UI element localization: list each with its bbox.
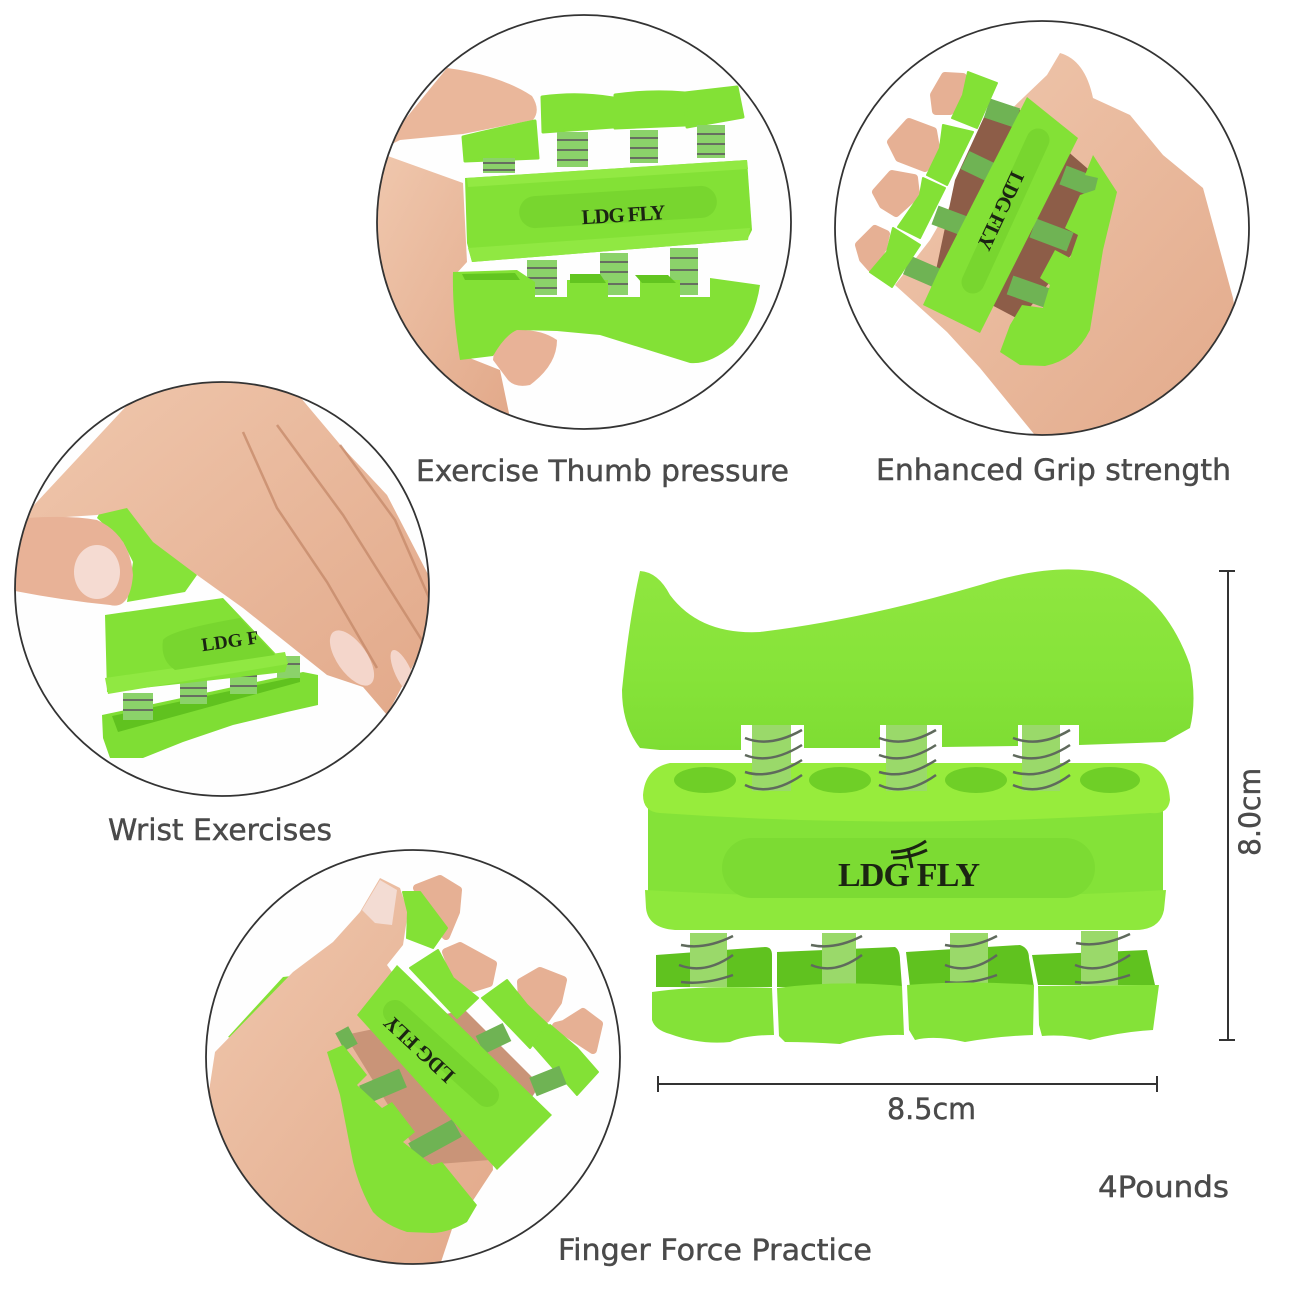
upper springs — [483, 125, 725, 173]
panel: wrist exercises photo — [10, 370, 440, 805]
middle block — [643, 763, 1170, 930]
block body — [648, 805, 1163, 895]
logo: LDG FLY — [838, 857, 980, 894]
dimension: height 8.0cm: 8.0cm — [1233, 768, 1267, 856]
logo: LDG FLY — [581, 200, 666, 229]
main product: finger exerciser — [622, 569, 1194, 1044]
panel: exercise thumb pressure photo — [370, 10, 800, 440]
springs — [123, 656, 300, 720]
label: 4 pounds: 4Pounds — [1098, 1170, 1229, 1204]
finger pads — [403, 892, 598, 1095]
device base — [102, 672, 318, 758]
fingers — [859, 76, 963, 268]
block top rim — [643, 763, 1170, 822]
block lower rim — [645, 890, 1166, 930]
gaps between springs — [345, 1010, 540, 1165]
lower springs — [679, 931, 1130, 987]
hand — [895, 53, 1250, 445]
logo: LDG F — [200, 627, 260, 656]
grip pockets — [462, 273, 676, 283]
hand — [20, 370, 432, 715]
logo: LDG FLY — [379, 1010, 459, 1088]
lower finger — [493, 330, 557, 386]
dimension: width 8.5cm: 8.5cm — [887, 1092, 976, 1126]
dimension: height 8.0cm — [1219, 571, 1267, 1040]
finger pad 3 — [907, 982, 1034, 1042]
finger creases — [243, 425, 430, 668]
top grip piece — [622, 569, 1194, 750]
panel: enhanced grip strength photo — [830, 15, 1260, 445]
dimension: width 8.5cm — [658, 1076, 1157, 1126]
finger pads — [870, 72, 997, 287]
caption: exercise thumb pressure: Exercise Thumb pressure — [416, 454, 789, 488]
hand: palm — [370, 150, 510, 418]
panel: finger force practice photo — [200, 845, 630, 1275]
thumb — [10, 517, 133, 606]
grip sliver behind hand — [228, 976, 289, 1038]
upper springs — [745, 725, 1070, 791]
thumb nail — [362, 880, 397, 925]
fingers — [417, 879, 599, 1050]
finger pad 1 — [652, 987, 774, 1043]
spring holes — [674, 767, 1140, 793]
springs — [340, 1032, 563, 1152]
finger pads — [463, 87, 743, 161]
finger pad 4 — [1038, 985, 1159, 1040]
gaps between springs — [935, 110, 1095, 320]
caption: wrist exercises: Wrist Exercises — [108, 813, 332, 847]
knob — [97, 500, 197, 602]
logo: LDG FLY — [972, 168, 1029, 254]
grip body — [1000, 155, 1117, 366]
thumb nail — [74, 545, 120, 599]
middle bar — [923, 97, 1078, 333]
logo dragonfly — [891, 841, 927, 868]
logo plate — [722, 838, 1095, 898]
bottom grip — [453, 270, 760, 363]
grip body — [327, 1045, 477, 1233]
finger pad 2 — [777, 983, 904, 1044]
caption: finger force practice: Finger Force Practice — [558, 1233, 872, 1267]
caption: enhanced grip strength: Enhanced Grip strength — [876, 453, 1231, 487]
middle bar — [105, 598, 288, 692]
hand: index finger — [394, 68, 537, 144]
hand — [200, 878, 493, 1268]
finger pad backs — [656, 945, 1155, 987]
springs — [907, 108, 1097, 298]
middle bar — [465, 160, 752, 262]
finger nails — [330, 630, 374, 686]
lower springs — [527, 248, 698, 295]
middle bar — [357, 965, 552, 1170]
